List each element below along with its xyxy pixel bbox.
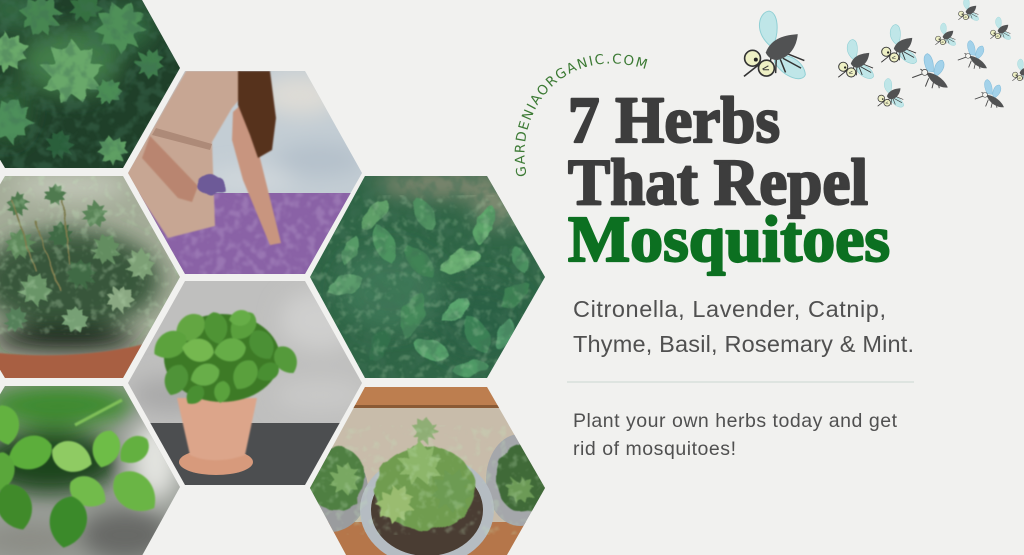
icon: large mosquito [744,11,805,79]
photo hexagon: lavender field [125,68,365,278]
photo hexagon: mint [0,382,185,555]
photo hexagon: rosemary pots [310,387,545,555]
table [150,423,340,485]
curved site name: GARDENIAORGANIC.COM [514,54,648,176]
rosemary foliage [326,416,541,530]
lavender bouquet [197,175,225,195]
sky clouds [224,71,358,188]
title: 7 Herbs [568,84,780,157]
saucer [179,452,253,475]
call to action: Plant your own herbs today and get [573,410,898,432]
reaching arm [232,100,281,245]
photo hexagon: thyme [0,170,185,385]
lavender rows [139,193,351,274]
title [568,84,890,276]
arm holding bundle [142,136,198,202]
call to action [573,410,898,460]
title: That Repel [568,146,868,219]
pot [177,398,257,460]
photo hexagon: catnip [305,172,550,382]
herb list: Citronella, Lavender, Catnip, [573,296,886,322]
hair [238,71,276,158]
side plants [305,446,365,510]
title: Mosquitoes [568,203,890,276]
wooden base [328,522,526,555]
mosquito swarm [744,0,1024,108]
herb list: Thyme, Basil, Rosemary & Mint. [573,331,914,357]
call to action: rid of mosquitoes! [573,438,736,460]
basil leaves [154,309,298,405]
photo hexagon: basil pot [125,278,365,488]
wooden planter edge [354,387,499,408]
terracotta pot [0,344,142,378]
side pots [310,448,368,532]
photo hexagon: citronella [0,0,190,175]
dress [126,71,246,238]
herb list [573,296,914,357]
central pot [360,464,494,555]
